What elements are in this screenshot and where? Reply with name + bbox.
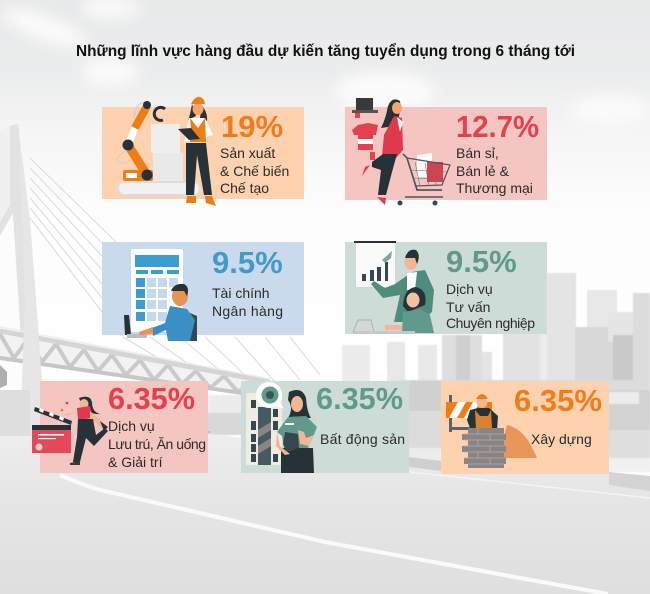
label: Lưu trú, Ăn uống — [108, 436, 206, 452]
label: Bán sỉ, — [456, 145, 499, 161]
label: & Giải trí — [108, 454, 163, 470]
label: Xây dựng — [531, 431, 592, 447]
panel: Tư vấn Chuyên nghiệp: 9.5% — [446, 244, 517, 279]
label: Chế tạo — [220, 180, 269, 196]
illustration: agent with building — [246, 382, 317, 473]
panel: Tài chính Ngân hàng: 9.5% — [212, 245, 283, 280]
panel: Bất động sản — [241, 381, 409, 473]
label: Chuyên nghiệp — [446, 315, 535, 331]
label: Dịch vụ — [446, 281, 493, 297]
panel: Xây dựng — [441, 381, 609, 474]
label: Tư vấn — [446, 299, 490, 315]
illustration: bricklayer — [446, 394, 537, 468]
panel: Tư vấn Chuyên nghiệp — [345, 241, 547, 334]
panel: Bất động sản: 6.35% — [316, 381, 403, 416]
label: & Chế biến — [220, 163, 289, 179]
label: Dịch vụ — [108, 418, 155, 434]
illustration: calculator and accountant — [124, 249, 197, 341]
title: Những lĩnh vực hàng đầu dự kiến tăng tuyển dụng trong 6 tháng tới — [76, 43, 575, 60]
label: Sản xuất — [220, 145, 275, 161]
panel: Lưu trú, Ăn uống & Giải trí — [32, 381, 208, 473]
bridge deck and truss — [0, 330, 270, 397]
illustration: clapperboard and dancer — [32, 397, 108, 465]
label: Tài chính — [212, 285, 270, 301]
illustration: robot arm and worker — [117, 97, 216, 206]
illustration: consultants with chart — [353, 241, 434, 334]
label: Bán lẻ & — [456, 163, 510, 179]
panel: Xây dựng: 6.35% — [514, 383, 602, 418]
panel: Sản xuất — [102, 97, 304, 206]
panel: Lưu trú, Ăn uống & Giải trí: 6.35% — [108, 381, 195, 416]
panel: Tài chính Ngân hàng — [102, 242, 304, 341]
tower — [0, 124, 43, 436]
cables — [0, 143, 320, 382]
panel: Bán sỉ: 12.7% — [456, 109, 539, 144]
label: Bất động sản — [320, 431, 405, 447]
label: Ngân hàng — [212, 303, 283, 319]
panel: Sản xuất: 19% — [221, 109, 283, 144]
illustration: shopper with cart — [352, 98, 450, 206]
label: Thương mại — [456, 180, 533, 196]
road — [0, 434, 650, 594]
panel: Bán sỉ — [345, 98, 547, 206]
